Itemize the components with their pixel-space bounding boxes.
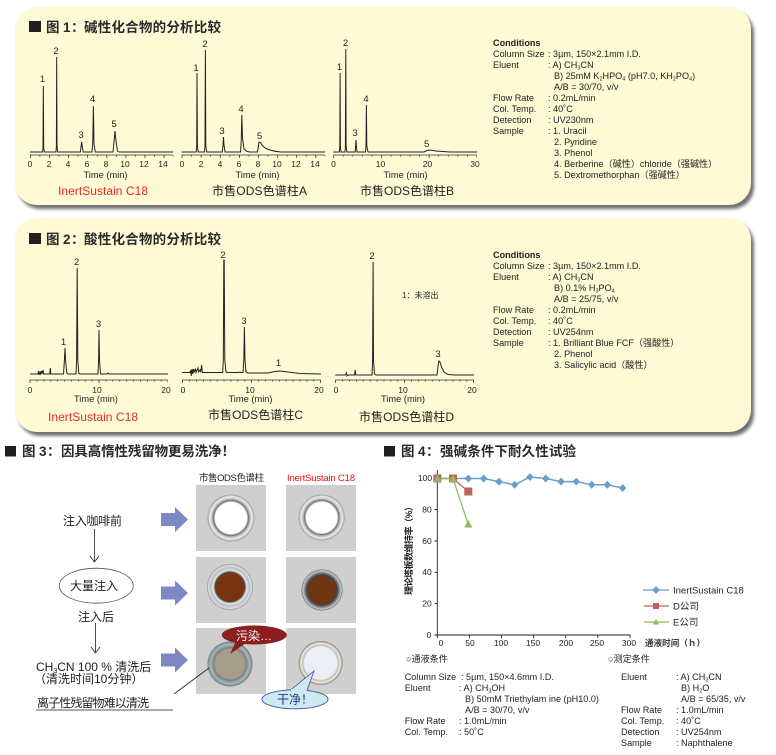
chart: InertSustain C18 basic compounds: 8 [104,159,109,169]
chart: InertSustain C18 basic compounds [28,46,174,180]
callout: stained: 污染… [236,628,272,643]
chart: commercial ODS column A: 3 [219,126,225,137]
flow: process steps: 大量注入 [70,578,118,593]
chart: commercial ODS column A: 10 [272,159,282,169]
conditions: figure 2: CN [580,272,594,282]
line chart: durability: 50 [465,638,475,648]
leader line: residue note [174,668,209,694]
line chart: durability: 通液时间（ｈ） [645,638,705,648]
conditions: figure 2: B) 0.1% H [554,283,595,293]
line chart: durability: 20 [422,598,432,608]
chart: commercial ODS column A: 5 [257,131,262,142]
line chart: durability: 0 [427,630,432,640]
caption: column A: 市售ODS色谱柱A [212,183,307,198]
conditions: measurement: : UV254nm [676,727,722,737]
flow: process steps: 离子性残留物难以清洗 [37,695,149,710]
chart: commercial ODS column A: 1 [193,63,199,74]
arrows: blue [161,507,188,672]
line chart: durability: 200 [559,638,573,648]
flow: process steps: CN 100 % 清洗后 [57,660,151,674]
chart: commercial ODS column C: 3 [241,316,247,327]
line chart: durability: 理论塔板数维持率（%） [403,502,414,595]
conditions: figure 1: A/B = 30/70, v/v [554,82,619,92]
heading: figure 2: ： [71,232,84,247]
chart: commercial ODS column B: 0 [331,159,336,169]
conditions: measurement: Col. Temp. [621,716,664,726]
line chart: durability: 80 [422,504,432,514]
conditions: measurement [608,653,746,748]
conditions: figure 2: Col. Temp. [493,316,536,326]
chart: commercial ODS column B: 10 [376,159,385,169]
chart: commercial ODS column A: Time (min) [235,170,280,180]
conditions: figure 1: 3 [577,66,580,72]
conditions: figure 1: 2 [673,76,676,82]
panel: figure 2 [15,218,754,436]
conditions: figure 1: 4 [622,76,625,82]
heading: figure 4: 图 [401,444,414,459]
conditions: measurement: A/B = 65/35, v/v [681,694,746,704]
line chart: durability: 100 [418,473,432,483]
chart: commercial ODS column D: 20 [467,385,477,395]
callout: stained [222,626,287,654]
column titles [199,472,355,484]
chart: commercial ODS column C: Time (min) [228,394,273,404]
conditions: measurement: Flow Rate [621,705,662,715]
conditions: figure 1: B) 25mM K [554,71,599,81]
chart: commercial ODS column A: 2 [202,39,208,50]
heading: figure 4 [384,443,576,459]
series: D company [433,474,472,496]
conditions: flow: Flow Rate [405,716,446,726]
conditions: figure 2: : 0.2mL/min [548,305,596,315]
chart: commercial ODS column D: Time (min) [381,394,425,404]
flow: process steps: CH [36,660,53,674]
line chart: durability: 100 [494,638,508,648]
line chart: durability: 60 [422,536,432,546]
conditions: figure 1: HPO [603,71,622,81]
heading: figure 2 [29,231,222,247]
chart: commercial ODS column A: 6 [237,159,242,169]
photo grid: frits [196,485,356,694]
chart: InertSustain C18 basic compounds: 14 [158,159,168,169]
conditions: figure 1: Flow Rate [493,93,534,103]
heading: figure 4: 强碱条件下耐久性试验 [440,443,576,459]
caption: column B: 市售ODS色谱柱B [360,183,454,198]
caption: InertSustain C18: InertSustain C18 [48,410,138,424]
chart: commercial ODS column A [180,39,325,180]
conditions: figure 1: PO [676,71,689,81]
flow: process steps [34,513,173,710]
chart: commercial ODS column B: 5 [424,139,429,150]
conditions: figure 1: : 40˚C [548,104,573,114]
chart: InertSustain C18 basic compounds: 12 [139,159,149,169]
conditions: flow: OH [491,683,505,693]
chart: InertSustain C18 acidic compounds: 1 [61,337,66,348]
conditions: figure 1: 4 [689,76,692,82]
line chart: durability: 0 [439,638,444,648]
column titles: InertSustain C18 [287,473,355,484]
conditions: figure 1: 2. Pyridine [554,137,597,147]
conditions: figure 1: ) [692,71,695,81]
chart: commercial ODS column C: 10 [245,385,255,395]
conditions: measurement: Detection [621,727,659,737]
conditions: measurement: O [702,683,709,693]
conditions: measurement: ○测定条件 [608,653,650,664]
flow: process steps: 3 [53,668,57,675]
conditions: figure 2: 3 [577,278,580,284]
heading: figure 3: 图 [22,444,36,459]
section: figure 3 [5,443,356,710]
chart: InertSustain C18 basic compounds: 2 [47,159,52,169]
conditions: measurement: 2 [699,688,702,694]
series: InertSustain C18 [434,473,626,492]
column titles: 市售ODS色谱柱 [199,472,264,484]
conditions: measurement: : Naphthalene [676,738,733,748]
chart: commercial ODS column A: 2 [199,159,204,169]
conditions: flow: : A) CH [459,683,488,693]
chart: commercial ODS column A: 8 [256,159,261,169]
chart: InertSustain C18 basic compounds: 4 [66,159,71,169]
series: E company [433,474,472,528]
conditions: measurement: : 1.0mL/min [676,705,724,715]
chart: commercial ODS column B [331,38,480,180]
conditions: figure 1: Column Size [493,49,545,59]
conditions: flow: 3 [488,688,491,694]
conditions: flow: : 1.0mL/min [459,716,507,726]
line chart: durability [403,470,744,648]
chart: commercial ODS column D: 3 [435,349,441,360]
conditions: figure 1: Sample [493,126,524,136]
chart: commercial ODS column D: 1：未溶出 [402,290,438,300]
chart: commercial ODS column C: 2 [220,250,226,261]
conditions: flow: B) 50mM Triethylam ine (pH10.0) [465,694,599,704]
conditions: flow: Column Size [405,672,456,682]
conditions: flow: : 5µm, 150×4.6mm I.D. [461,672,554,682]
flow: process steps: 注入咖啡前 [63,513,122,528]
chart: InertSustain C18 acidic compounds: 10 [92,385,102,395]
line chart: durability: 250 [590,638,604,648]
chart: InertSustain C18 basic compounds: 4 [90,94,95,105]
conditions: figure 2: : A) CH [548,272,577,282]
caption: InertSustain C18: InertSustain C18 [58,184,148,198]
conditions: measurement: CN [708,672,722,682]
chart: commercial ODS column B: 3 [352,128,358,139]
legend: InertSustain C18 [673,586,744,596]
conditions: measurement: B) H [681,683,699,693]
chart: commercial ODS column C: 0 [181,385,186,395]
heading: figure 1: 图 [46,20,60,35]
conditions: figure 1: Col. Temp. [493,104,536,114]
callout: clean: 干净！ [277,692,313,706]
conditions: figure 2: : UV254nm [548,327,594,337]
chart: commercial ODS column D: 0 [334,385,339,395]
chart: InertSustain C18 basic compounds: 0 [28,159,33,169]
caption: column C: 市售ODS色谱柱C [208,407,303,422]
conditions: figure 1: : 3µm, 150×2.1mm I.D. [548,49,641,59]
conditions: figure 1: Detection [493,115,531,125]
chart: InertSustain C18 acidic compounds: 2 [74,257,79,268]
conditions: figure 1: CN [580,60,594,70]
chart: InertSustain C18 basic compounds: 6 [85,159,90,169]
conditions: figure 2: 2. Phenol [554,349,592,359]
chart: InertSustain C18 acidic compounds: 3 [96,319,101,330]
line chart: durability: 150 [526,638,540,648]
chart: InertSustain C18 basic compounds: 1 [40,74,45,85]
conditions: figure 1: (pH7.0, KH [625,71,673,81]
conditions: flow: A/B = 30/70, v/v [465,705,530,715]
conditions: figure 2: : 3µm, 150×2.1mm I.D. [548,261,641,271]
chart: commercial ODS column A: 14 [310,159,320,169]
chart: commercial ODS column C: 20 [314,385,324,395]
chart: commercial ODS column A: 12 [291,159,301,169]
conditions: figure 1: Conditions [493,38,540,48]
chart: commercial ODS column B: 4 [363,94,369,105]
chart: commercial ODS column A: 4 [218,159,223,169]
conditions: figure 1: : 0.2mL/min [548,93,596,103]
legend: E公司 [673,618,698,628]
chart: InertSustain C18 basic compounds: 3 [78,130,84,141]
chart: commercial ODS column D: 2 [369,251,375,262]
conditions: figure 1: 5. Dextromethorphan（强碱性） [554,169,685,180]
chart: InertSustain C18 acidic compounds: 20 [161,385,171,395]
heading: figure 4: 4 [418,444,426,459]
heading: figure 1: 碱性化合物的分析比较 [84,19,222,35]
legend: D公司 [673,602,699,612]
conditions: figure 2: Detection [493,327,531,337]
callout: clean [262,671,328,709]
conditions: measurement: : 40˚C [676,716,701,726]
conditions: flow: Eluent [405,683,431,693]
conditions: figure 2 [493,250,679,370]
chart: commercial ODS column B: Time (min) [383,170,428,180]
heading: figure 1 [29,19,222,35]
conditions: figure 2: Column Size [493,261,545,271]
chart: commercial ODS column C [181,250,324,404]
conditions: measurement: 3 [705,678,708,684]
caption: column D: 市售ODS色谱柱D [359,409,454,424]
conditions: figure 2: Sample [493,338,524,348]
heading: figure 2: 图 [46,232,60,247]
legend [643,586,744,628]
chart: commercial ODS column B: 20 [423,159,432,169]
heading: figure 3: ： [47,444,60,459]
line chart: durability: 40 [422,567,432,577]
conditions: figure 2: Eluent [493,272,519,282]
flow: process steps: （清洗时间10分钟） [34,671,143,686]
conditions: measurement: Sample [621,738,652,748]
conditions: figure 2: 3 [595,288,599,294]
conditions: figure 1: : 1. Uracil [548,126,586,136]
line chart: durability: 300 [622,638,636,648]
chart: commercial ODS column A: 4 [238,104,244,115]
chart: commercial ODS column D [334,251,477,404]
conditions: flow [405,653,599,737]
conditions: figure 2: : 1. Brilliant Blue FCF（强酸性） [548,337,679,348]
chart: InertSustain C18 basic compounds: Time (min) [83,170,128,180]
heading: figure 3: 因具高惰性残留物更易洗净！ [61,443,235,459]
section: figure 4 [384,443,746,748]
flow: process steps: 注入后 [78,609,114,624]
heading: figure 3: 3 [39,444,47,459]
conditions: flow: : 50˚C [459,727,484,737]
chart: InertSustain C18 basic compounds: 5 [111,119,117,130]
chart: commercial ODS column A: 0 [180,159,185,169]
conditions: figure 2: 4 [612,288,615,294]
conditions: flow: Col. Temp. [405,727,448,737]
chart: InertSustain C18 acidic compounds: Time (min) [74,394,118,404]
heading: figure 1: 1 [63,20,71,35]
conditions: figure 1: 3. Phenol [554,148,592,158]
heading: figure 2: 2 [63,232,71,247]
panel: figure 1 [15,7,754,209]
conditions: figure 1 [493,38,717,180]
chart: InertSustain C18 acidic compounds: 0 [28,385,33,395]
chart: commercial ODS column D: 10 [398,385,408,395]
heading: figure 1: ： [71,20,84,35]
conditions: measurement: : A) CH [676,672,705,682]
conditions: figure 2: Conditions [493,250,540,260]
conditions: figure 1: 4. Berberine（碱性）chloride（强碱性） [554,158,717,169]
chart: InertSustain C18 basic compounds: 2 [53,46,59,57]
conditions: figure 2: Flow Rate [493,305,534,315]
chart: commercial ODS column B: 2 [343,38,348,49]
chart: commercial ODS column C: 1 [276,358,281,369]
conditions: figure 1: 2 [599,76,603,82]
conditions: flow: ○通液条件 [406,653,448,664]
conditions: figure 1: : UV230nm [548,115,594,125]
conditions: figure 2: : 40˚C [548,316,573,326]
chart: commercial ODS column B: 1 [337,62,342,73]
chart: InertSustain C18 acidic compounds [28,257,171,404]
chart: InertSustain C18 basic compounds: 10 [120,159,130,169]
heading: figure 4: ： [426,444,440,459]
conditions: figure 2: A/B = 25/75, v/v [554,294,619,304]
heading: figure 2: 酸性化合物的分析比较 [84,231,222,247]
conditions: figure 1: Eluent [493,60,519,70]
chart: commercial ODS column B: 30 [470,159,480,169]
conditions: figure 2: PO [599,283,612,293]
conditions: figure 1: : A) CH [548,60,577,70]
conditions: figure 2: 3. Salicylic acid（酸性） [554,359,653,370]
conditions: measurement: Eluent [621,672,647,682]
